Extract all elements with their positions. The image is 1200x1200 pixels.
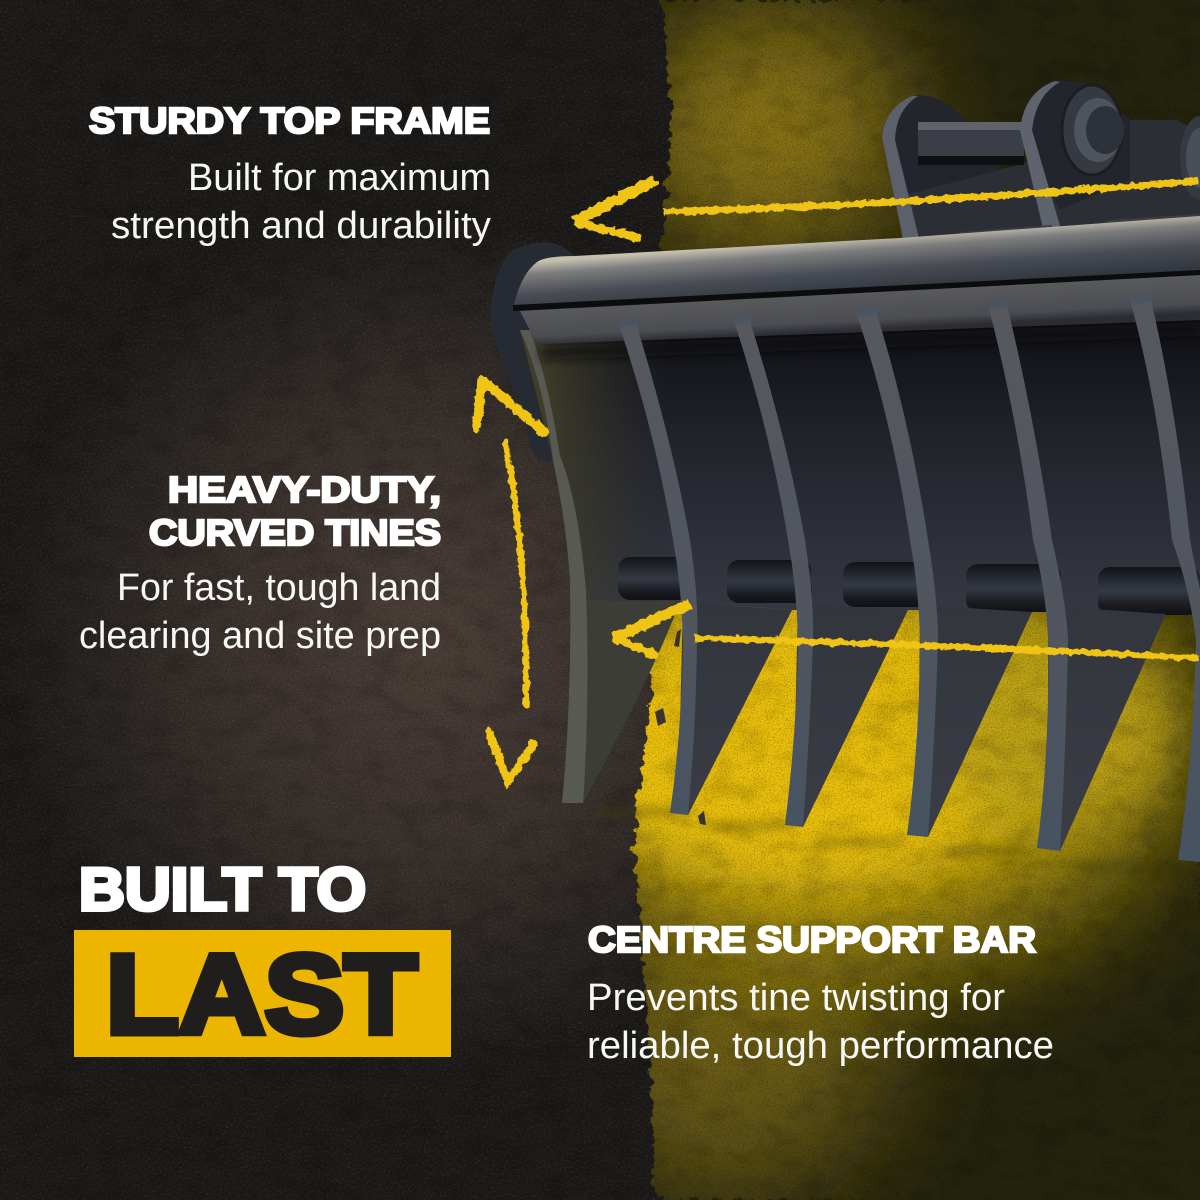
headline banner: last: LAST [106,932,417,1057]
callout: heavy-duty curved tines: clearing and site prep [79,615,441,657]
rib top caps [618,294,1153,328]
top frame bar [513,216,1200,309]
callout: heavy-duty curved tines [79,469,441,657]
gusset shadow [540,322,1200,360]
mounting brackets and pins [882,80,1200,275]
tine blades [562,600,1166,851]
callout: centre support bar [587,919,1054,1067]
callout: sturdy top frame: Built for maximum [188,157,491,199]
callout: heavy-duty curved tines: For fast, tough land [117,567,441,609]
panel [520,310,1200,614]
callout: heavy-duty curved tines: CURVED TINES [149,512,441,553]
front bracket [1020,80,1130,210]
callout: centre support bar: Prevents tine twisting for [587,977,1005,1019]
tine ribs [618,296,1200,862]
arrow: top frame pointer [574,180,1198,238]
rear bracket [882,95,1000,195]
arrow: centre support bar pointer [614,604,1198,658]
pin head two [1180,116,1200,200]
left outer tine edge [520,330,587,803]
gusset band [520,275,1200,344]
support bar segments [618,557,1200,615]
ground shadows under tines [595,808,1175,870]
headline: built to last [74,856,451,1057]
upper pin [918,122,1024,158]
gusset highlights [937,225,1058,273]
front bracket edge [1020,81,1072,267]
arrow: curved tines double-headed [476,380,544,782]
callout: heavy-duty curved tines: HEAVY-DUTY, [168,469,441,510]
paint splatter along edge [655,629,706,825]
callout: centre support bar: reliable, tough performance [587,1025,1054,1067]
pin head one [1062,85,1124,175]
callout: sturdy top frame: strength and durability [111,205,491,247]
rake attachment [490,80,1200,862]
rear bracket edge [882,96,928,275]
callout: sturdy top frame: STURDY TOP FRAME [89,100,490,141]
side plate [490,242,575,461]
callout: sturdy top frame [89,100,491,247]
back plate between brackets [905,120,1200,270]
headline: built to last: BUILT TO [79,856,366,923]
callout: centre support bar: CENTRE SUPPORT BAR [588,919,1036,960]
